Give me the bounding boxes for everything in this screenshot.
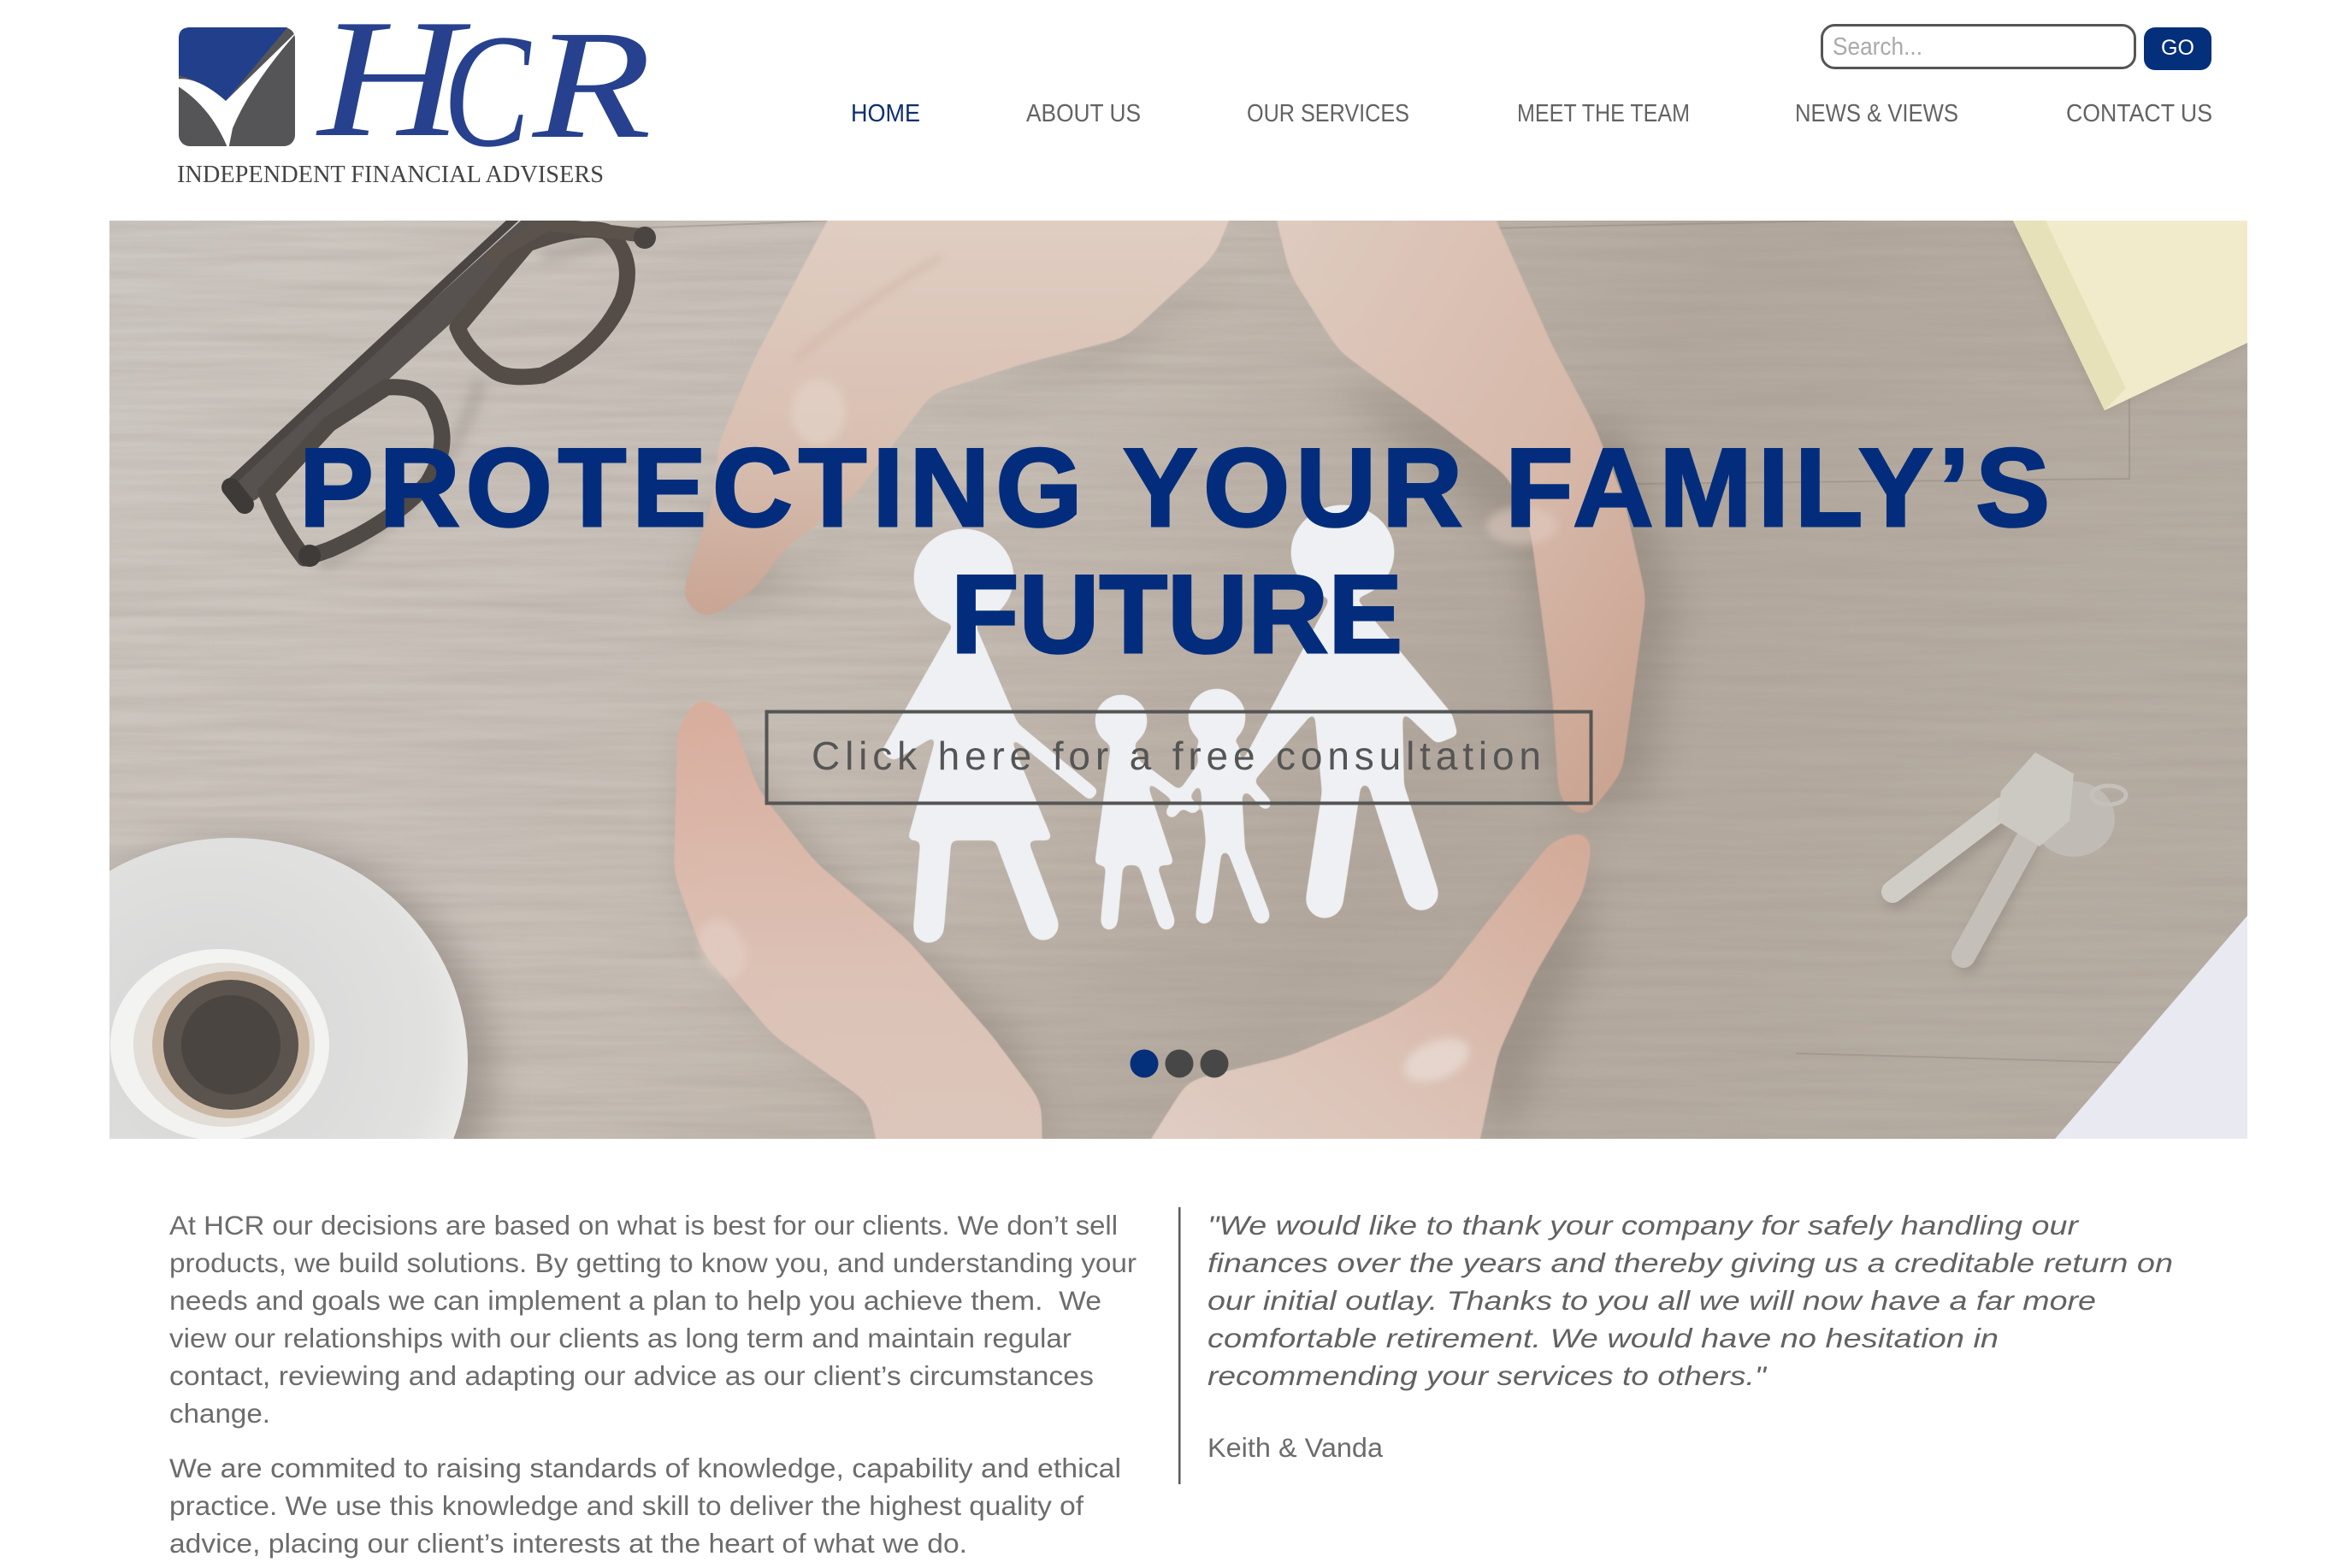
search button: GO [2161,36,2194,60]
text block: testimonial: recommending your services to others." [1207,1360,1768,1391]
text block: about: We are commited to raising standards of knowledge, capability and ethical [169,1453,1121,1483]
text block: testimonial: comfortable retirement. We would have no hesitation in [1207,1323,1999,1353]
headline: FUTURE [951,551,1402,676]
logo wordmark: R [532,0,652,171]
text block: about: advice, placing our client’s interests at the heart of what we do. [169,1528,967,1559]
icon: hand shadows [684,274,1676,1146]
logo tagline: INDEPENDENT FINANCIAL ADVISERS [177,161,604,188]
text block: about: products, we build solutions. By getting to know you, and understanding your [169,1247,1137,1278]
navigation: CONTACT US [2066,100,2212,127]
search box: Search... [1833,33,1922,61]
icon: hand top right [1270,192,1646,821]
text block: testimonial: our initial outlay. Thanks to you all we will now have a far more [1207,1285,2096,1316]
search button [2144,27,2211,70]
navigation: OUR SERVICES [1247,100,1409,127]
text block: about: needs and goals we can implement a plan to help you achieve them. We [169,1285,1101,1316]
mother [881,529,1099,928]
button: free consultation [766,711,1591,804]
child two [1172,689,1266,916]
icon: coffee cup and saucer [109,829,505,1139]
text block: testimonial: finances over the years and thereby giving us a creditable return on [1207,1247,2173,1278]
child one [1095,695,1193,922]
icon: glasses [229,210,656,567]
search box [1822,26,2134,68]
father [1231,505,1458,899]
icon: sticky note [2013,221,2247,410]
headline [299,425,2050,676]
navigation [851,100,2212,127]
text block: about: practice. We use this knowledge and skill to deliver the highest quality of [169,1490,1083,1521]
logo wordmark: C [443,2,532,181]
text block: about [169,1210,1137,1559]
text block: testimonial: "We would like to thank your company for safely handling our [1207,1210,2080,1241]
navigation: NEWS & VIEWS [1795,100,1958,127]
logo [169,0,652,188]
text block: about: view our relationships with our clients as long term and maintain regular [169,1323,1072,1353]
icon: checkmark square [169,24,304,150]
icon: hand top left [684,221,1230,616]
icon: hand bottom left [674,694,1042,1171]
text block: testimonial: Keith & Vanda [1207,1432,1383,1463]
text block: testimonial [1207,1210,2173,1463]
text block: about: At HCR our decisions are based on what is best for our clients. We don’t sell [169,1210,1118,1241]
navigation: MEET THE TEAM [1517,100,1690,127]
navigation: ABOUT US [1026,100,1141,127]
icon: hand bottom right [1151,834,1591,1139]
text block: about: change. [169,1398,270,1429]
wood table [109,219,2247,1139]
icon: keys [1892,752,2126,962]
panel: hero photo [109,221,2247,1139]
carousel dots [1131,1050,1228,1077]
icon: paper family [881,505,1458,928]
logo wordmark [315,0,652,181]
divider [1178,1207,1180,1484]
navigation: HOME [851,100,920,127]
button: free consultation: Click here for a free consultation [812,734,1541,778]
text block: about: contact, reviewing and adapting our advice as our client’s circumstances [169,1360,1094,1391]
headline: PROTECTING YOUR FAMILY’S [299,425,2050,550]
icon: paper corner [2055,916,2247,1139]
